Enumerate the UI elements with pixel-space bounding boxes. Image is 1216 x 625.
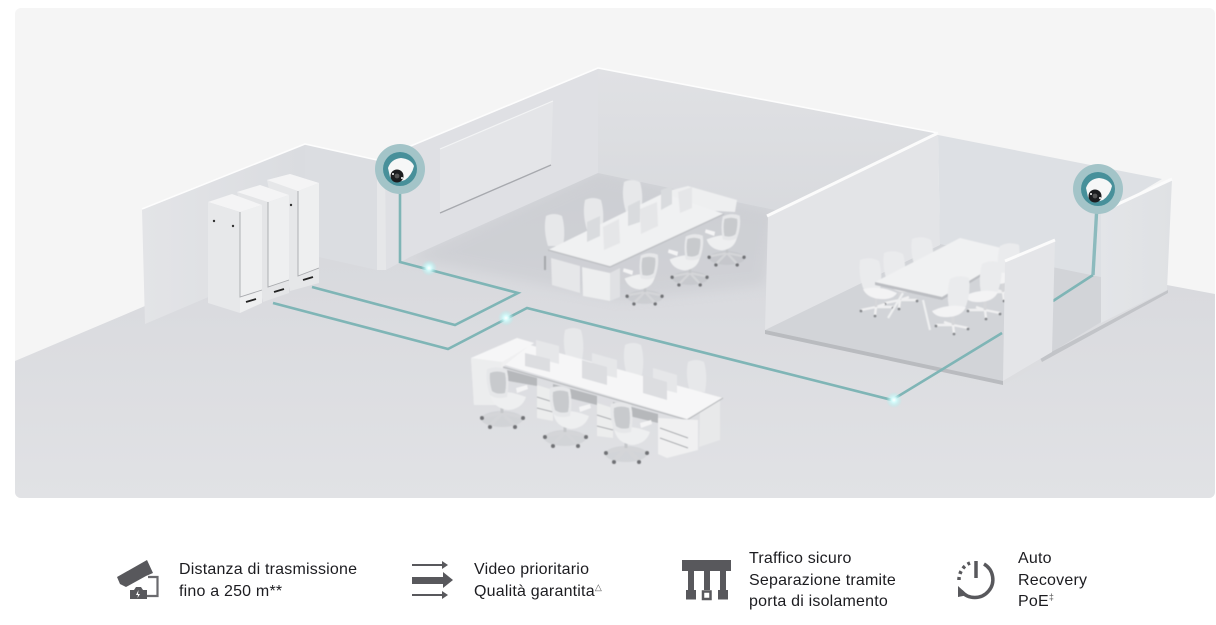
glow nodes — [421, 260, 902, 408]
icon: camera with power — [117, 560, 159, 599]
central rear wall — [377, 68, 938, 270]
text: video prioritario: Qualità garantita△ — [474, 582, 602, 600]
floor — [15, 173, 1215, 498]
icon: priority arrows — [412, 561, 453, 599]
camera left — [375, 144, 425, 194]
text: auto recovery: PoE‡ — [1018, 592, 1054, 610]
icon: auto recovery — [957, 561, 995, 600]
text: distanza: Distanza di trasmissione — [179, 561, 357, 578]
icon: port isolation — [682, 560, 731, 600]
text: video prioritario: Video prioritario — [474, 561, 589, 578]
text: distanza — [179, 561, 357, 600]
text: distanza: fino a 250 m** — [179, 582, 282, 600]
text: video prioritario — [474, 561, 602, 600]
text: auto recovery: Auto — [1018, 550, 1052, 567]
back desk with chairs — [545, 180, 746, 306]
background panel — [15, 8, 1215, 360]
text: auto recovery — [1018, 550, 1087, 610]
network cables — [273, 185, 1097, 400]
text: traffico sicuro: Separazione tramite — [749, 572, 896, 588]
camera right — [1073, 164, 1123, 214]
server cabinets — [208, 174, 319, 313]
text: auto recovery: Recovery — [1018, 572, 1087, 588]
text: traffico sicuro — [749, 550, 896, 610]
floor shade — [446, 227, 760, 292]
text: traffico sicuro: Traffico sicuro — [749, 550, 852, 567]
meeting room partition and end wall — [1003, 179, 1172, 381]
front desk with chairs — [471, 328, 723, 464]
room floor — [766, 310, 1101, 381]
left wall — [142, 144, 377, 324]
whiteboard — [440, 101, 553, 213]
text: traffico sicuro: porta di isolamento — [749, 593, 888, 610]
meeting room — [765, 133, 1168, 385]
meeting table and chairs — [859, 237, 1020, 335]
